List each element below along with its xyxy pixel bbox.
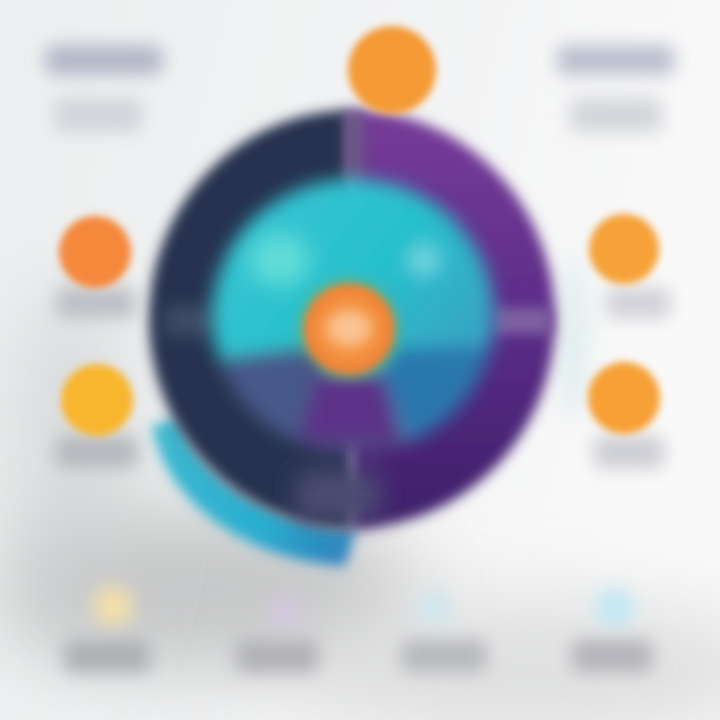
disc: bottom purple: [294, 366, 412, 454]
left label 2: [56, 436, 138, 468]
bottom icon blue: [418, 591, 452, 625]
ring horizontal mark right: [494, 308, 552, 334]
outer ring: navy left half: [149, 110, 352, 528]
disc: teal top: [200, 170, 510, 470]
icon: left orange circle: [59, 216, 131, 288]
bottom label 3: [402, 640, 486, 672]
right label 2: [594, 436, 664, 468]
bottom icon purple: [270, 597, 300, 627]
disc: lower right blue: [372, 339, 494, 446]
icon: left yellow circle: [61, 364, 133, 436]
ring horizontal mark left: [164, 306, 218, 336]
bottom icon yellow: [93, 586, 133, 626]
heading: top right: [558, 46, 674, 132]
bottom label 1: [64, 640, 150, 672]
disc: bottom band: [310, 433, 388, 458]
donut chart: [149, 110, 555, 528]
icon: top orange circle: [348, 26, 436, 114]
centre circle: [299, 279, 399, 379]
outer ring: purple right half: [352, 110, 555, 528]
icon: right orange circle lower: [588, 362, 660, 434]
ring patch bottom: [296, 470, 380, 520]
left label 1: [56, 288, 136, 318]
bottom label 2: [236, 640, 318, 672]
icon: right orange circle upper: [589, 214, 659, 284]
bottom icon cyan: [595, 588, 635, 628]
right label 1: [606, 288, 670, 318]
ring divider top: [344, 112, 364, 184]
highlight right on teal: [406, 242, 442, 278]
disc: lower left slate: [212, 338, 334, 450]
heading: top left: [46, 46, 162, 132]
background shading: [0, 260, 720, 720]
teal swoosh under chart: [152, 418, 356, 566]
highlight left on teal: [250, 234, 310, 286]
bottom label 4: [572, 640, 652, 672]
inner disc: [200, 170, 510, 470]
